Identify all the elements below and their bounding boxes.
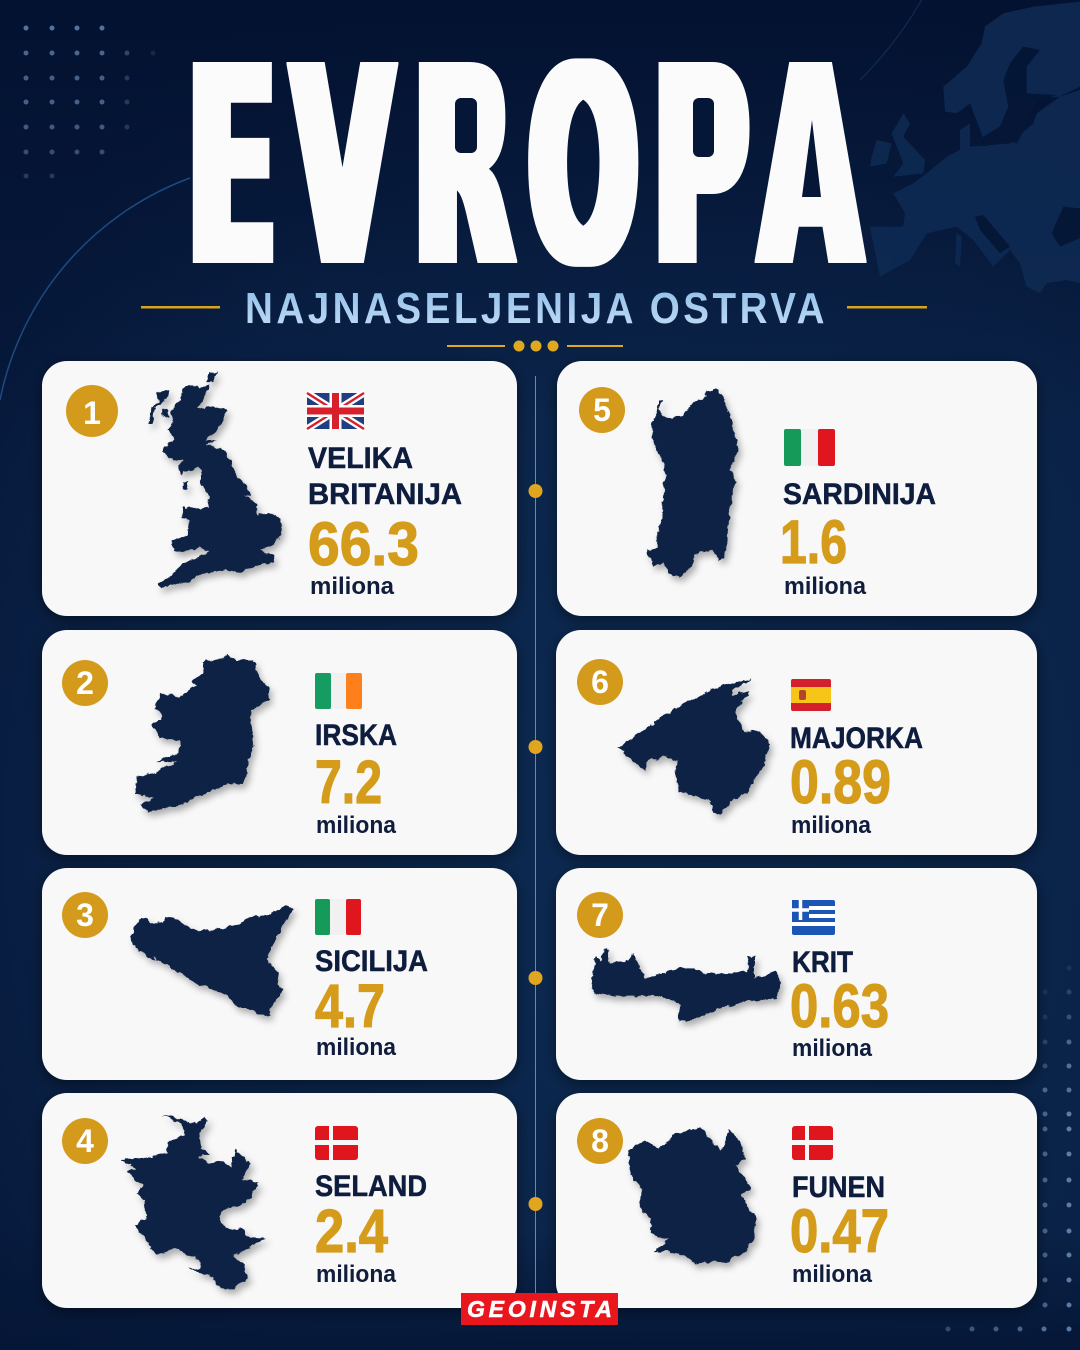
dot pattern top left bbox=[24, 26, 156, 178]
decorative arc bbox=[0, 178, 190, 400]
value: 1.6 bbox=[780, 508, 847, 576]
rank badge 8: 8 bbox=[591, 1123, 609, 1159]
flag: Denmark bbox=[315, 1126, 358, 1160]
unit: miliona bbox=[784, 573, 867, 600]
name: VELIKA bbox=[308, 442, 413, 475]
unit: miliona bbox=[316, 812, 397, 839]
map: Funen bbox=[628, 1127, 756, 1263]
name: SELAND bbox=[315, 1170, 427, 1203]
rank badge 8 bbox=[577, 1118, 623, 1164]
map: Zealand bbox=[120, 1115, 266, 1288]
panel: Sicilija bbox=[42, 868, 517, 1080]
subtitle: NAJNASELJENIJA OSTRVA bbox=[245, 284, 828, 333]
value: 0.63 bbox=[790, 972, 889, 1040]
name: MAJORKA bbox=[790, 722, 923, 755]
name: IRSKA bbox=[315, 719, 397, 752]
map: Ireland bbox=[135, 655, 270, 812]
rank badge 2 bbox=[62, 660, 108, 706]
unit: miliona bbox=[310, 573, 395, 600]
background map of Europe bbox=[860, 0, 1080, 293]
flag: Ireland bbox=[315, 673, 362, 709]
name: KRIT bbox=[792, 946, 853, 979]
panel: Majorka bbox=[556, 630, 1037, 855]
value: 4.7 bbox=[315, 972, 385, 1040]
flag: United Kingdom bbox=[307, 393, 364, 429]
flag: Greece bbox=[792, 900, 835, 935]
unit: miliona bbox=[791, 812, 872, 839]
value: 0.47 bbox=[790, 1197, 889, 1265]
panel: Seland bbox=[42, 1093, 517, 1308]
panel: Krit bbox=[556, 868, 1037, 1080]
name: BRITANIJA bbox=[308, 478, 462, 511]
logo: Geoinsta: GEOINSTA bbox=[467, 1296, 612, 1322]
rank badge 3: 3 bbox=[76, 897, 94, 933]
flag: Italy bbox=[784, 429, 835, 466]
map: Sicily bbox=[130, 905, 293, 1017]
name: SICILIJA bbox=[315, 945, 428, 978]
name: FUNEN bbox=[792, 1171, 885, 1204]
rank badge 4 bbox=[62, 1118, 108, 1164]
name bbox=[308, 442, 462, 511]
value: 2.4 bbox=[315, 1197, 388, 1265]
rank badge 5 bbox=[579, 387, 625, 433]
rank badge 7 bbox=[577, 892, 623, 938]
name: SARDINIJA bbox=[783, 478, 936, 511]
title: EVROPA bbox=[188, 10, 860, 327]
map: Great Britain bbox=[148, 372, 281, 588]
flag: Denmark bbox=[792, 1126, 833, 1160]
unit: miliona bbox=[792, 1261, 873, 1288]
unit: miliona bbox=[316, 1034, 397, 1061]
panel: Sardinija bbox=[557, 361, 1037, 616]
ornament bbox=[447, 340, 623, 352]
value: 7.2 bbox=[315, 748, 382, 816]
panel: Irska bbox=[42, 630, 517, 855]
unit: miliona bbox=[792, 1035, 873, 1062]
rank badge 5: 5 bbox=[593, 392, 611, 428]
map: Sardinia bbox=[647, 390, 738, 577]
flag: Spain bbox=[791, 679, 831, 711]
timeline bbox=[528, 376, 542, 1296]
dot pattern bottom right bbox=[946, 966, 1072, 1332]
map: Mallorca bbox=[618, 678, 770, 815]
map: Crete bbox=[592, 948, 780, 1022]
rank badge 6 bbox=[577, 659, 623, 705]
rank badge 7: 7 bbox=[591, 897, 609, 933]
panel: Velika Britanija bbox=[42, 361, 517, 616]
flag: Italy bbox=[315, 899, 361, 935]
rank badge 3 bbox=[62, 892, 108, 938]
rank badge 6: 6 bbox=[591, 664, 609, 700]
rank badge 1: 1 bbox=[83, 395, 101, 431]
rank badge 2: 2 bbox=[76, 665, 94, 701]
value: 0.89 bbox=[790, 748, 891, 816]
panel: Funen bbox=[556, 1093, 1037, 1308]
rank badge 1 bbox=[66, 385, 118, 437]
value: 66.3 bbox=[308, 510, 419, 578]
unit: miliona bbox=[316, 1261, 397, 1288]
rank badge 4: 4 bbox=[76, 1123, 94, 1159]
